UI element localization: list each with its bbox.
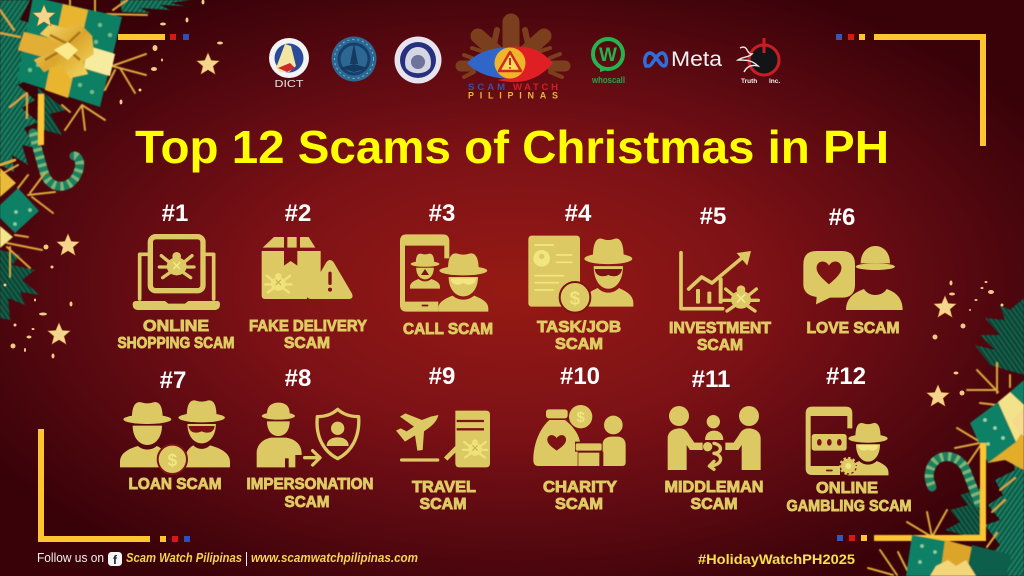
- logo: Meta: [645, 48, 722, 71]
- footer: hashtag: #HolidayWatchPH2025: [698, 551, 855, 567]
- icon: document, coin and spy: [528, 236, 633, 313]
- icon: facebook: f: [113, 553, 118, 567]
- icon: money bag, box and person: $: [577, 410, 585, 426]
- icon: facebook: [108, 552, 122, 567]
- logo: Scam Watch Pilipinas: WATCH: [513, 82, 558, 93]
- scam 6: love: [803, 204, 903, 337]
- label: LOAN SCAM: [128, 476, 222, 493]
- label: MIDDLEMAN: [664, 479, 764, 496]
- logo: Whoscall: whoscall: [591, 75, 625, 85]
- icon: document, coin and spy: $: [570, 287, 581, 308]
- frame corner: top right: [836, 34, 983, 146]
- icon: phone with spies: [400, 234, 488, 312]
- decoration: left middle gift: [0, 160, 55, 277]
- label line 2: SCAM: [420, 496, 466, 513]
- number 11: #11: [692, 366, 730, 393]
- label line 2: SCAM: [697, 337, 743, 354]
- number 9: #9: [429, 363, 455, 390]
- decoration: bottom-right fir, gifts and candy cane: [868, 298, 1024, 576]
- logo: Scam Watch Pilipinas: [461, 22, 565, 100]
- scam 1: online shopping: [118, 200, 234, 352]
- logo: Whoscall: W: [599, 45, 617, 66]
- scam 2: fake delivery: [249, 200, 367, 352]
- label: INVESTMENT: [669, 320, 771, 337]
- logo: Scam Watch Pilipinas: SCAM: [468, 82, 505, 93]
- decoration: top-left fir, gift and candy cane: [0, 0, 190, 320]
- number 10: #10: [560, 363, 600, 390]
- number 7: #7: [160, 367, 186, 394]
- icon: money bag, box and person: [533, 405, 626, 466]
- icon: person, arrow and shield: [257, 403, 359, 467]
- number 5: #5: [700, 203, 726, 230]
- label: TASK/JOB: [537, 319, 621, 336]
- title: Top 12 Scams of Christmas in PH: [135, 121, 889, 173]
- icon: two spies and coin: $: [168, 450, 178, 470]
- label: CALL SCAM: [403, 321, 493, 338]
- logo: DICT: DICT: [274, 78, 304, 90]
- label line 2: SCAM: [284, 494, 330, 511]
- label: ONLINE: [816, 480, 878, 497]
- scam 4: task/job: [528, 200, 633, 353]
- footer: follow us: Follow us on: [37, 550, 104, 565]
- logo: CICC: [332, 36, 376, 82]
- logo: DICT: [269, 38, 309, 90]
- scam 3: call: [400, 200, 493, 338]
- logo: Truth Inc.: [738, 38, 780, 85]
- scam 5: investment: [669, 203, 771, 354]
- logos row: [269, 22, 780, 100]
- label: IMPERSONATION: [246, 476, 374, 493]
- logo: Whoscall: [591, 39, 625, 85]
- number 3: #3: [429, 200, 455, 227]
- icon: parcel and warning: [262, 237, 353, 299]
- label line 2: SCAM: [555, 336, 603, 353]
- icon: chart and bug: [681, 251, 758, 311]
- icon: phone, gear and spy: [806, 407, 888, 475]
- scam 11: middleman: [664, 366, 764, 513]
- logo: NPC: [394, 36, 442, 84]
- scam 8: impersonation: [246, 365, 374, 511]
- label: LOVE SCAM: [806, 320, 900, 337]
- label line 2: SCAM: [690, 496, 738, 513]
- footer: page name and website: Scam Watch Pilipinas: [126, 550, 242, 565]
- icon: plane and ticket: [396, 411, 490, 467]
- label: TRAVEL: [412, 479, 476, 496]
- icon: middleman handover: [668, 406, 761, 470]
- label: FAKE DELIVERY: [249, 318, 367, 335]
- label: CHARITY: [543, 479, 617, 496]
- icon: laptop with bug: [133, 237, 220, 310]
- frame corner: top left: [118, 34, 189, 40]
- decoration: confetti: [4, 0, 1004, 396]
- label line 2: GAMBLING SCAM: [786, 498, 912, 515]
- number 4: #4: [565, 200, 592, 227]
- label line 2: SHOPPING SCAM: [118, 335, 234, 352]
- scam 7: loan: [120, 367, 230, 493]
- frame dots: bottom right: [837, 535, 867, 541]
- number 1: #1: [162, 200, 188, 227]
- number 6: #6: [829, 204, 855, 231]
- logo: Truth Inc.: Inc.: [769, 78, 780, 85]
- scam 9: travel: [396, 363, 490, 513]
- frame corner: bottom left: [41, 429, 190, 542]
- number 2: #2: [285, 200, 311, 227]
- logo: Scam Watch Pilipinas: PILIPINAS: [468, 90, 558, 100]
- scam 12: online gambling: [786, 363, 912, 515]
- label line 2: SCAM: [284, 335, 330, 352]
- icon: heart bubble and spy: [803, 246, 903, 310]
- label: ONLINE: [143, 318, 209, 335]
- logo: Truth Inc.: Truth: [741, 78, 757, 85]
- logo: Meta: Meta: [671, 48, 722, 71]
- scam 10: charity: [533, 363, 626, 513]
- label line 2: SCAM: [555, 496, 603, 513]
- footer: follow us: www.scamwatchpilipinas.com: [251, 550, 418, 565]
- footer: follow us: [37, 550, 418, 567]
- decoration: stars: [33, 5, 956, 406]
- number 8: #8: [285, 365, 311, 392]
- number 12: #12: [826, 363, 866, 390]
